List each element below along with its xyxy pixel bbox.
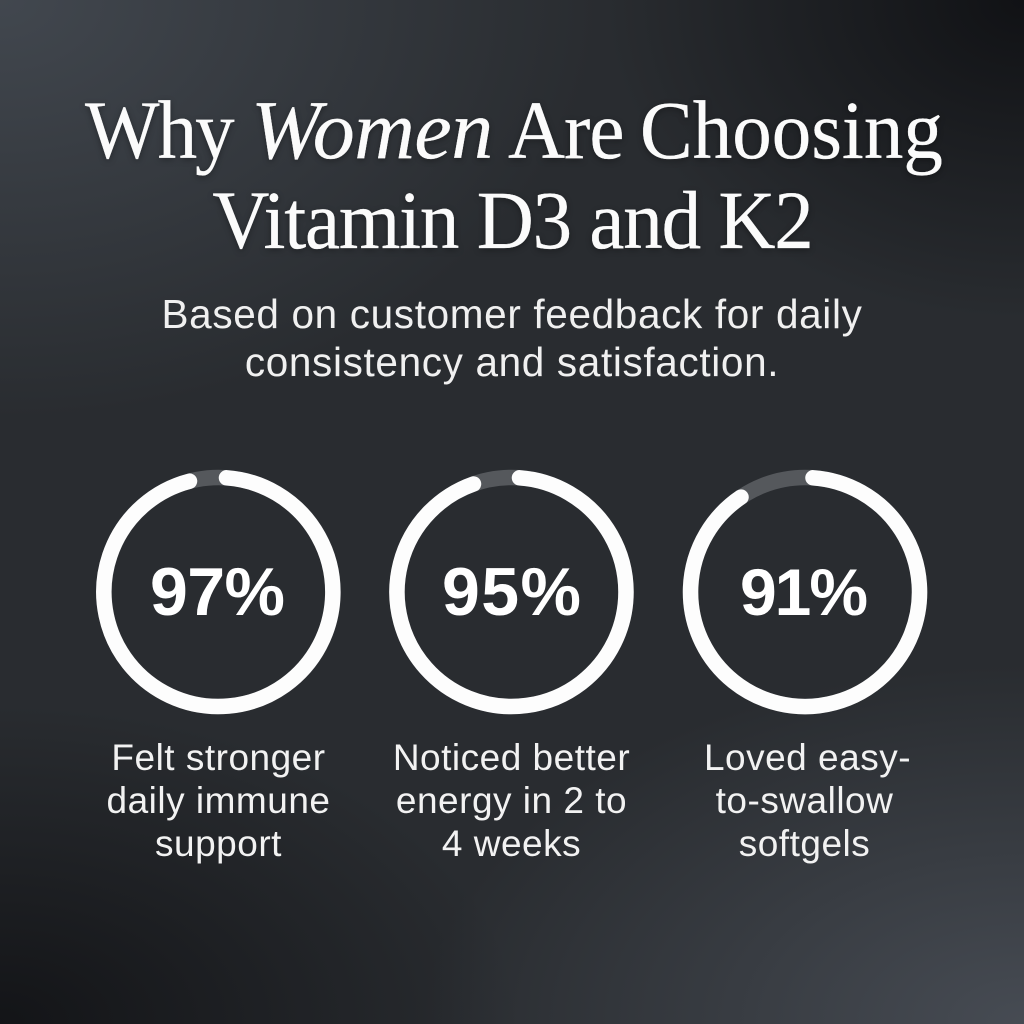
- label: better energy: [393, 737, 630, 864]
- ring: 91%: [690, 478, 920, 707]
- label: immune support: [106, 737, 330, 864]
- label: softgels: [704, 737, 911, 864]
- title: Choosing: [640, 85, 943, 177]
- label: softgels: to-swallow: [716, 780, 893, 821]
- ring: 95%: 95%: [442, 554, 581, 630]
- title: Vitamin D3 and K2: [212, 175, 813, 267]
- subtitle: consistency and satisfaction.: [245, 339, 779, 385]
- ring: 97%: 97%: [150, 554, 285, 630]
- title: Women: [251, 84, 493, 177]
- title: [84, 84, 943, 267]
- title: Why: [85, 85, 233, 177]
- label: immune support: support: [155, 823, 282, 864]
- subtitle: [161, 291, 863, 385]
- label: better energy: 4 weeks: [442, 823, 581, 864]
- title: Are: [508, 85, 623, 177]
- label: softgels: Loved easy-: [704, 737, 911, 778]
- label: better energy: energy in 2 to: [396, 780, 627, 821]
- label: immune support: daily immune: [106, 780, 330, 821]
- subtitle: Based on customer feedback for daily: [161, 291, 863, 337]
- label: immune support: Felt stronger: [111, 737, 326, 778]
- label: better energy: Noticed better: [393, 737, 630, 778]
- label: softgels: softgels: [739, 823, 870, 864]
- ring: 97%: [104, 478, 333, 707]
- ring: 95%: [397, 478, 626, 707]
- ring: 91%: 91%: [740, 555, 868, 629]
